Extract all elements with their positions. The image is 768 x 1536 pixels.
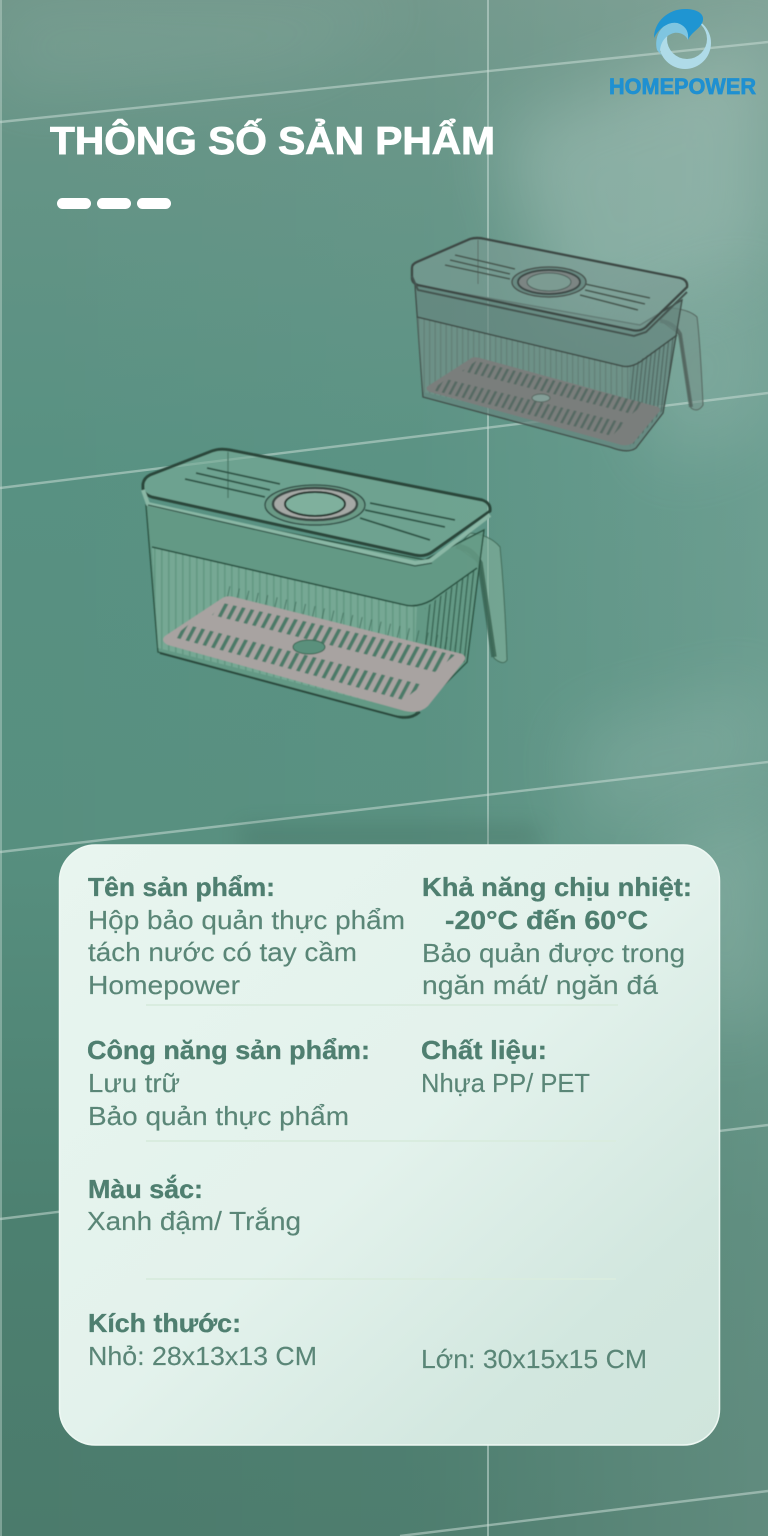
spec: product name: Homepower [88, 970, 240, 1000]
drain tray [163, 596, 465, 712]
spec: material [421, 1035, 590, 1098]
panel: product specifications [60, 845, 720, 1445]
icon: wave swirl [654, 9, 711, 69]
spec: color: Xanh đậm/ Trắng [87, 1206, 301, 1236]
spec: product name: Hộp bảo quản thực phẩm [88, 905, 405, 935]
box lid [143, 449, 490, 556]
product: large storage box [143, 449, 507, 718]
spec: product name: tách nước có tay cầm [88, 937, 357, 967]
logo wordmark: HOMEPOWER [609, 74, 756, 99]
box handle [660, 308, 703, 410]
title: THÔNG SỐ SẢN PHẨM [50, 118, 495, 163]
panel card [60, 845, 720, 1445]
spec: size [88, 1308, 647, 1374]
spec: size: Nhỏ: 28x13x13 CM [88, 1341, 317, 1371]
spec: material: Nhựa PP/ PET [421, 1068, 590, 1098]
title dash decoration [57, 198, 171, 209]
spec: temperature resistance [422, 872, 692, 1000]
spec: size: Kích thước: [88, 1308, 241, 1338]
spec: material: Chất liệu: [421, 1035, 547, 1065]
spec: function: Bảo quản thực phẩm [88, 1101, 349, 1131]
box body [146, 505, 484, 717]
box handle [457, 533, 507, 663]
panel shadow [240, 826, 540, 848]
spec: temperature resistance: Bảo quản được trong [422, 938, 685, 968]
lid knob [512, 267, 586, 297]
spec: function: Lưu trữ [88, 1068, 180, 1098]
spec: temperature resistance: Khả năng chịu nhiệt: [422, 872, 692, 902]
spec: temperature resistance: ngăn mát/ ngăn đá [422, 970, 659, 1000]
box lid [412, 238, 687, 331]
lid knob [265, 485, 365, 525]
spec: color: Màu sắc: [88, 1174, 203, 1204]
drain tray [426, 357, 660, 445]
spec: product name [88, 872, 405, 1000]
spec: temperature resistance: -20°C đến 60°C [445, 905, 648, 935]
logo: Homepower [609, 9, 756, 99]
spec: function: Công năng sản phẩm: [87, 1035, 370, 1065]
spec: product name: Tên sản phẩm: [88, 872, 275, 902]
spec: color [87, 1174, 301, 1236]
box body [415, 285, 682, 451]
spec: size: Lớn: 30x15x15 CM [421, 1344, 647, 1374]
product: small storage box [412, 238, 703, 451]
spec: function [87, 1035, 370, 1131]
